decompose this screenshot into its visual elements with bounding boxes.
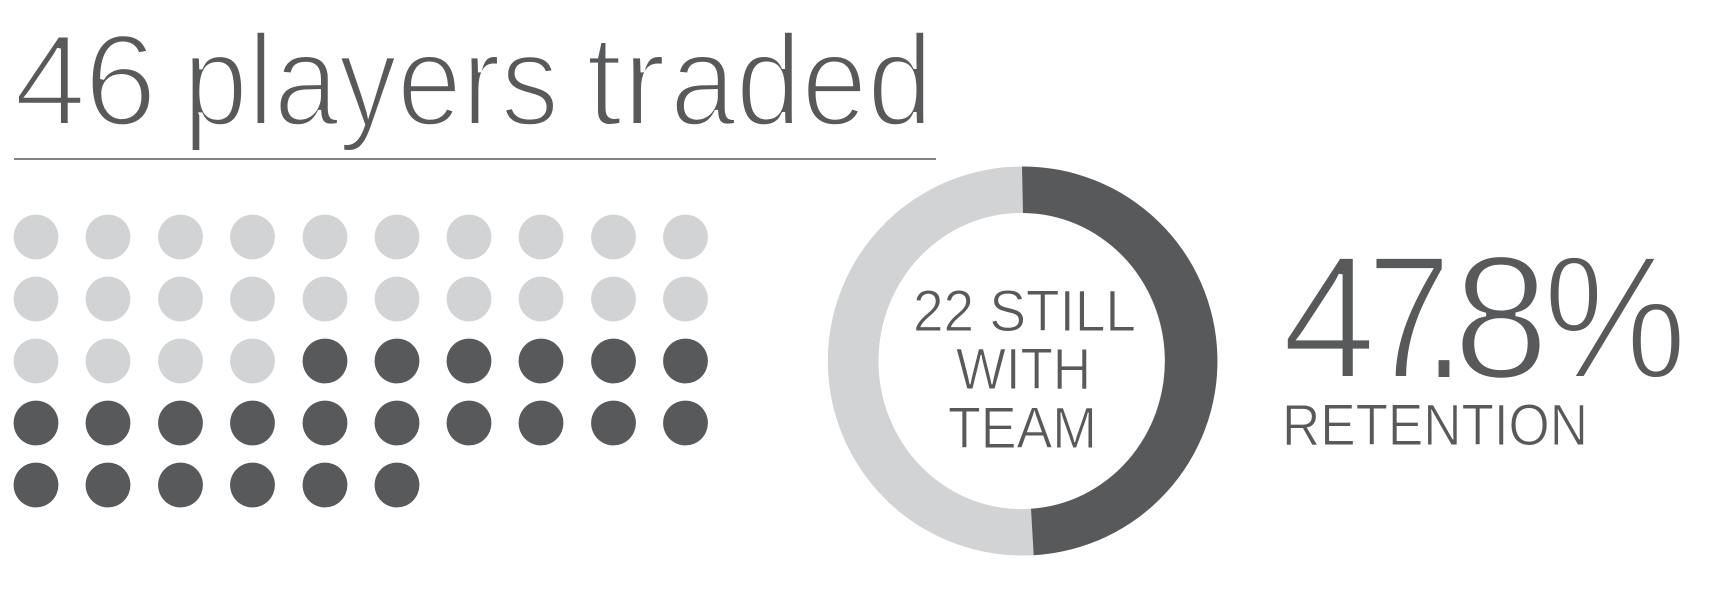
retention percentage: %	[1543, 220, 1687, 416]
title: aded	[670, 7, 933, 153]
title: tr	[586, 7, 666, 153]
retention percentage: 8	[1453, 220, 1549, 416]
donut label: 22 STILL	[913, 279, 1136, 344]
dot grid: 24 traded away	[14, 215, 708, 383]
title	[14, 7, 933, 153]
retention percentage: .	[1426, 220, 1462, 416]
retention percentage	[1282, 220, 1687, 416]
title: 4	[14, 7, 86, 153]
retention percentage: 7	[1367, 220, 1451, 416]
title: 6	[84, 7, 157, 153]
title: players	[183, 7, 559, 153]
dot grid: 22 still with team	[14, 339, 708, 507]
donut label: TEAM	[948, 396, 1097, 461]
donut label: WITH	[956, 337, 1091, 402]
donut label	[913, 279, 1136, 461]
retention label: RETENTION	[1282, 393, 1588, 458]
donut chart	[828, 166, 1217, 556]
retention percentage: 4	[1282, 220, 1376, 416]
